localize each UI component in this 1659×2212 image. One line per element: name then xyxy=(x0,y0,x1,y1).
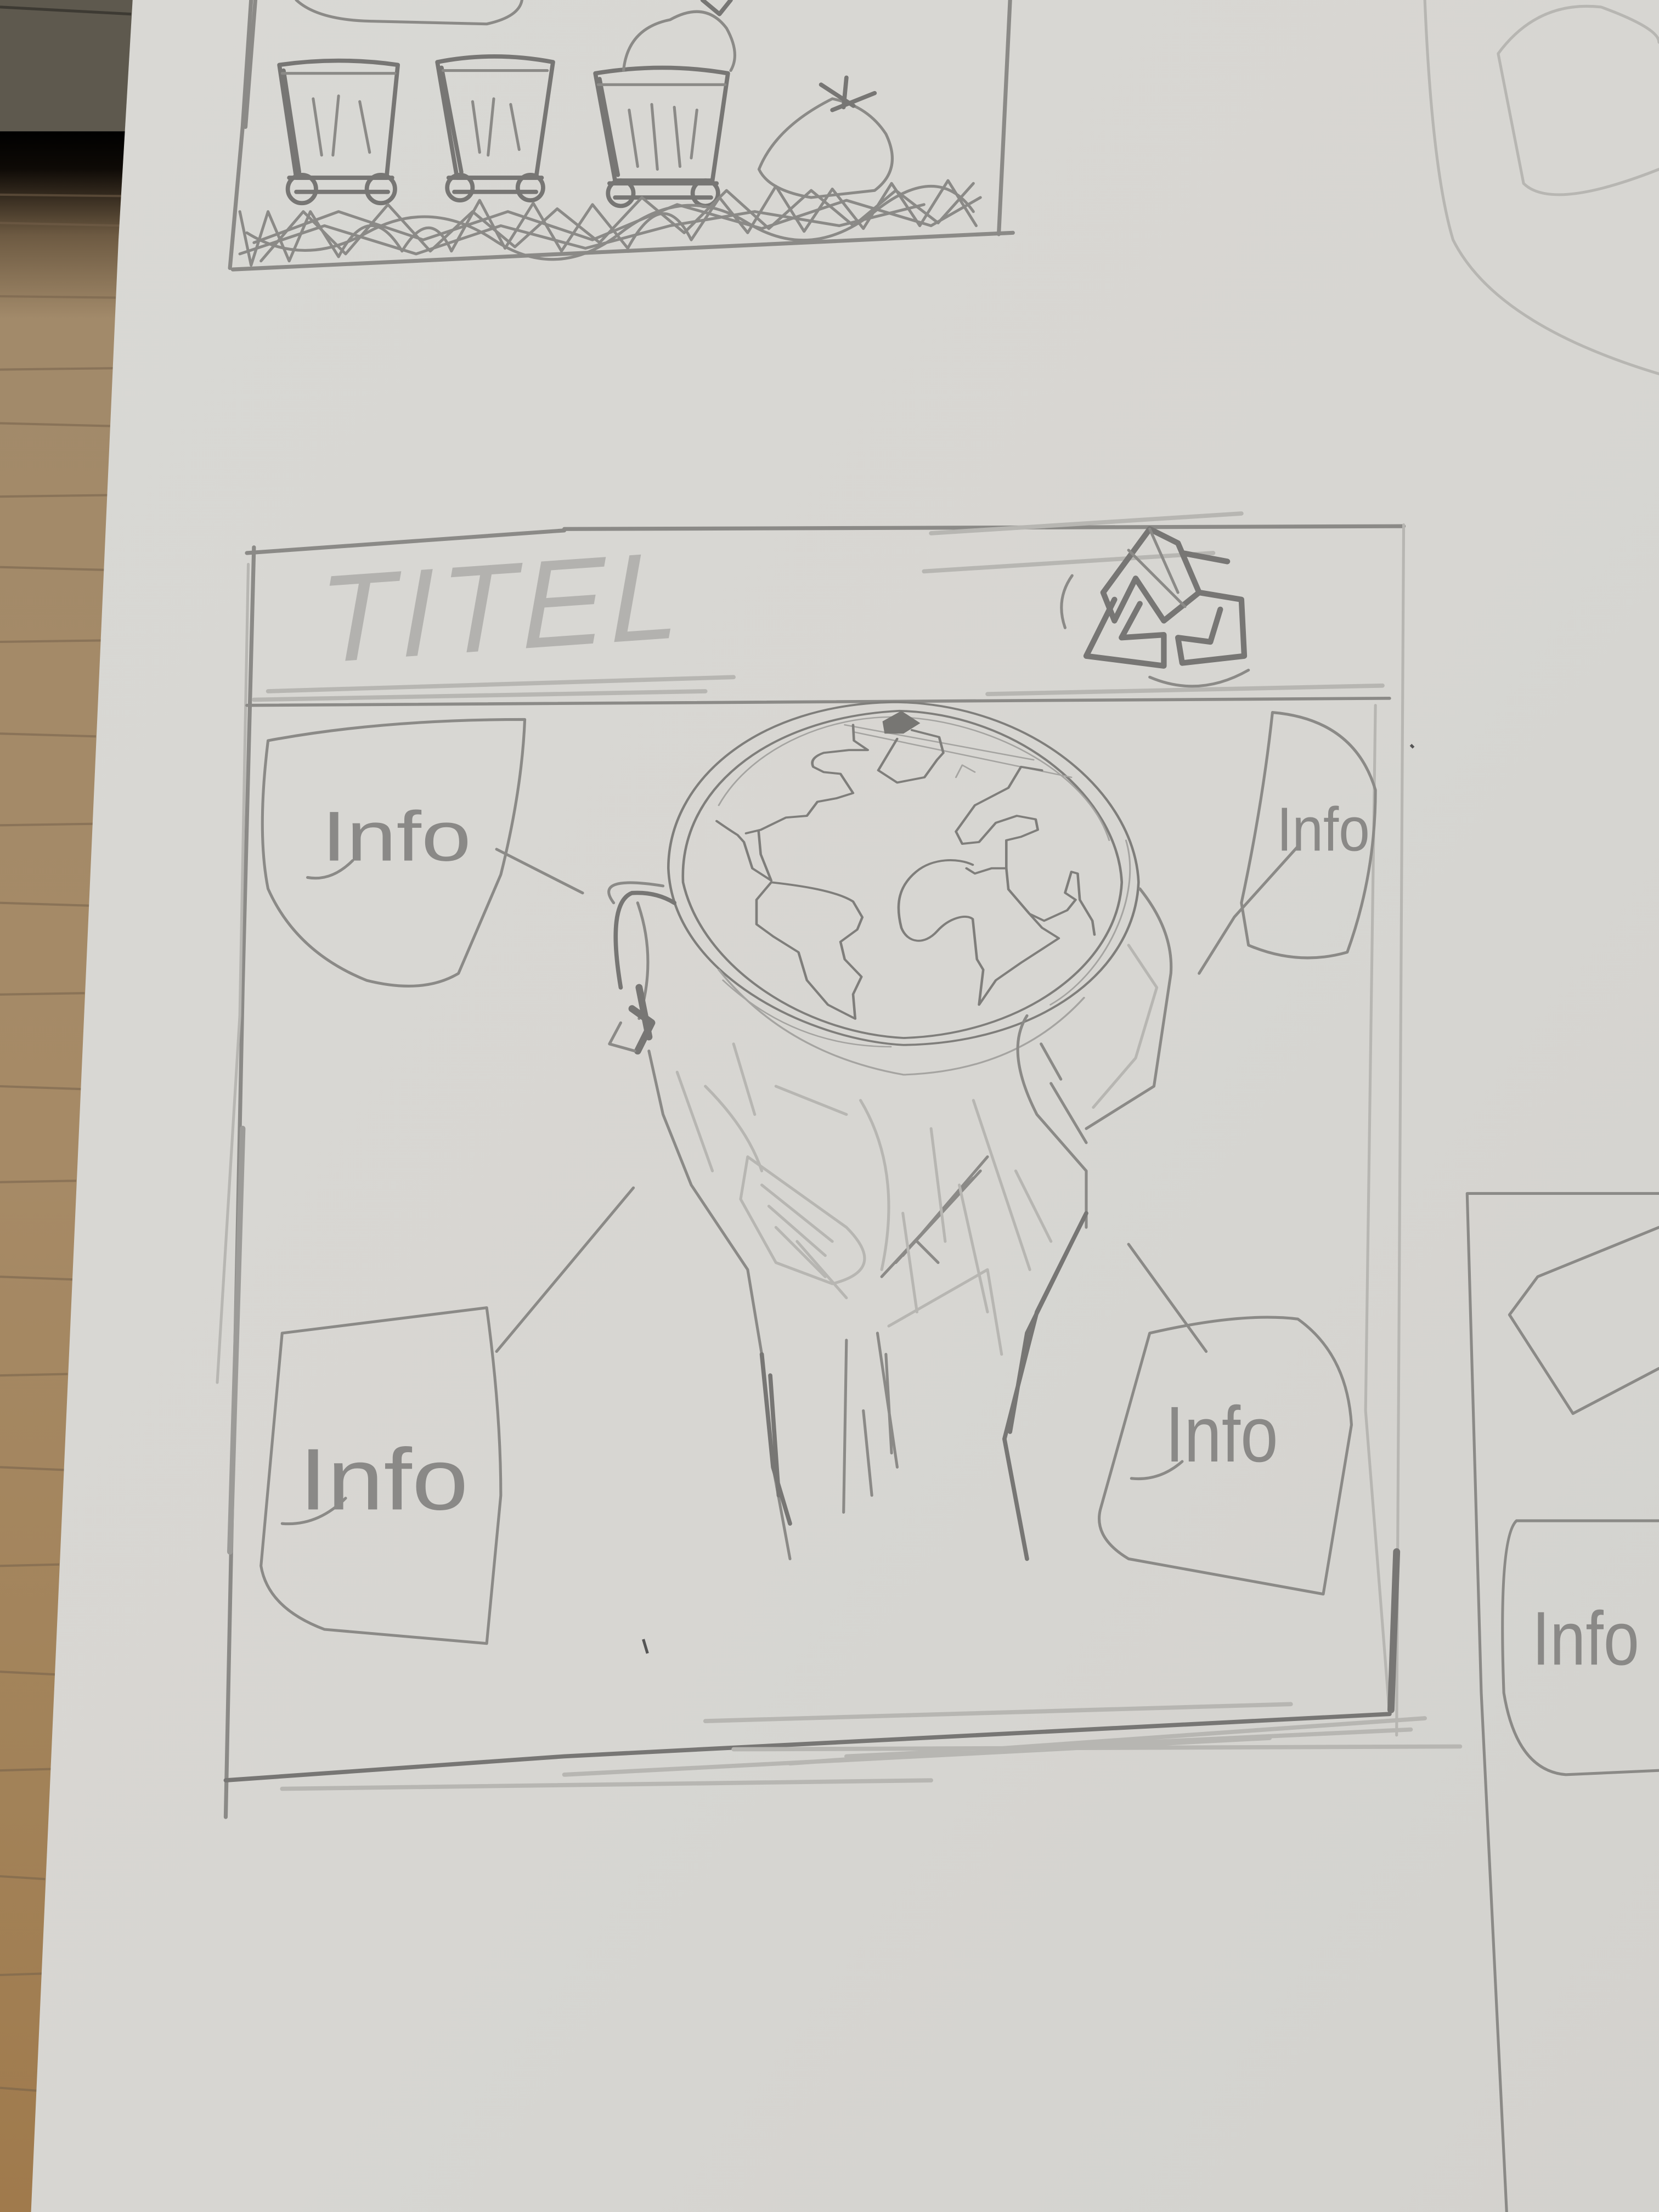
scribbled ground xyxy=(240,180,980,265)
rubbish bag xyxy=(759,77,892,198)
continent: south america xyxy=(757,882,862,1019)
info box top left xyxy=(262,719,525,986)
info label: Info xyxy=(1165,1390,1278,1479)
continent: greenland xyxy=(878,730,944,782)
pencil specks xyxy=(644,745,1414,1654)
info box bottom right xyxy=(1099,1317,1351,1594)
fingers xyxy=(1018,889,1171,1227)
info label: Info xyxy=(299,1430,469,1528)
main frame xyxy=(217,525,1460,1817)
info label: Info xyxy=(321,798,471,876)
connector bottom right xyxy=(1128,1244,1206,1351)
icon: recycling symbol xyxy=(1062,529,1249,686)
continent: africa xyxy=(899,860,1059,1005)
bin 3 with full bag xyxy=(595,0,735,206)
thumb xyxy=(609,883,674,1051)
title band xyxy=(247,514,1390,706)
globe rim xyxy=(668,702,1138,1075)
info box top right xyxy=(1242,713,1375,958)
dark polar smudge xyxy=(883,711,920,733)
top sketch: waste bins xyxy=(230,0,1013,269)
bin 2 xyxy=(437,57,553,200)
speech bubble fragment xyxy=(296,0,522,24)
forearm xyxy=(649,1044,1086,1559)
info label: Info xyxy=(1277,795,1370,864)
connector top left xyxy=(496,849,583,893)
title text: TITEL xyxy=(308,523,698,690)
bin 1 xyxy=(279,61,398,203)
top sketch frame xyxy=(230,0,1013,269)
continent: eurasia xyxy=(956,767,1094,935)
right lower sketch fragment xyxy=(1467,1193,1659,2212)
top-right faint sketch xyxy=(1425,0,1659,374)
globe xyxy=(668,702,1138,1075)
globe held by hand xyxy=(609,702,1171,1559)
connector top right xyxy=(1199,847,1298,973)
info label: Info xyxy=(1532,1596,1639,1681)
table background xyxy=(0,0,170,2212)
continent: north america xyxy=(716,725,868,881)
connector bottom left xyxy=(496,1188,634,1351)
info box bottom left xyxy=(261,1308,501,1644)
